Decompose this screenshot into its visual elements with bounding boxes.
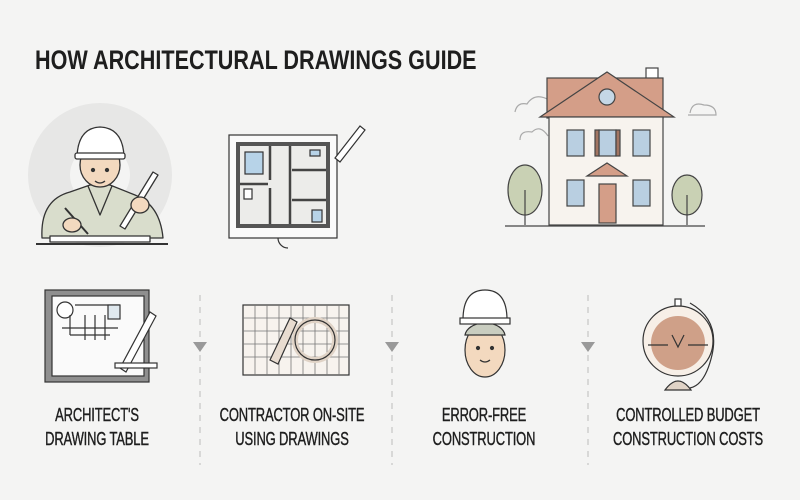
label: contractor on-site: USING DRAWINGS [235, 429, 349, 449]
label: controlled budget: CONTROLLED BUDGET [616, 405, 760, 425]
label: controlled budget: CONSTRUCTION COSTS [613, 429, 763, 449]
label: architect's drawing table [45, 405, 149, 449]
icon: construction worker face [460, 290, 510, 377]
dividers with arrows [193, 295, 595, 465]
label: error-free construction: CONSTRUCTION [433, 429, 535, 449]
icon: budget gauge [643, 299, 714, 390]
icon: drawing table [45, 290, 157, 382]
label: architect's drawing table: ARCHITECT'S [55, 405, 139, 425]
label: contractor on-site [220, 405, 364, 449]
icon: contractor on site [243, 305, 349, 375]
label: architect's drawing table: DRAWING TABLE [45, 429, 149, 449]
label: error-free construction: ERROR-FREE [442, 405, 526, 425]
title: HOW ARCHITECTURAL DRAWINGS GUIDE [35, 45, 477, 75]
icon: house [505, 68, 716, 226]
label: error-free construction [433, 405, 535, 449]
icon: floor plan [229, 126, 365, 248]
label: controlled budget [613, 405, 763, 449]
icon: architect at desk [28, 103, 172, 247]
label: contractor on-site: CONTRACTOR ON-SITE [220, 405, 364, 425]
